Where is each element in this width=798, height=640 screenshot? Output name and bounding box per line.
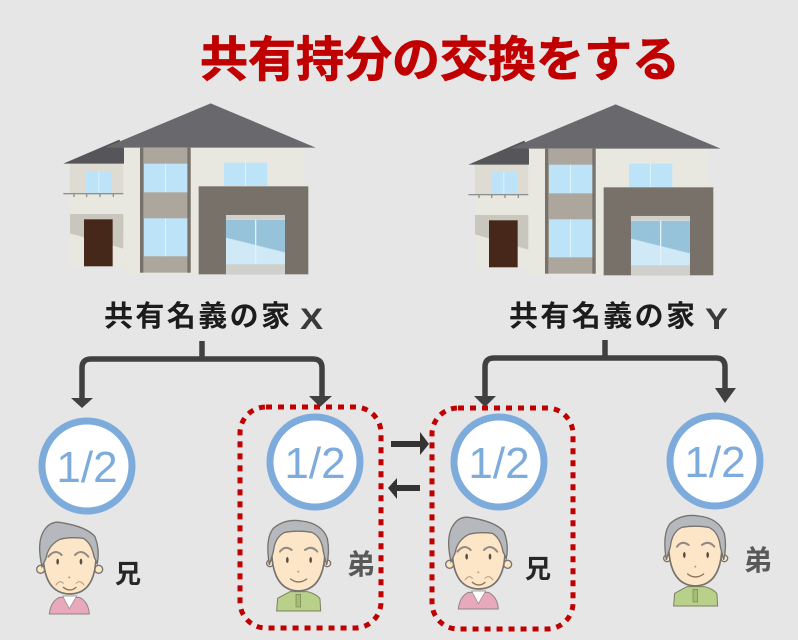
arrow: house Y split (474, 340, 736, 407)
arrow: exchange right (391, 432, 429, 455)
label: house X letter: X (300, 303, 323, 336)
label: elder brother X: 兄 (115, 559, 141, 589)
icon: elder brother X (37, 522, 103, 614)
label: elder brother Y: 兄 (525, 554, 551, 584)
label: house X: 共有名義の家 (104, 300, 292, 333)
icon: younger brother X (267, 520, 331, 611)
icon: younger brother Y (664, 515, 728, 606)
label: younger brother Y: 弟 (744, 545, 772, 576)
share circle 3 (454, 417, 544, 507)
title: 共有持分の交換をする (200, 34, 680, 87)
icon: house Y (468, 104, 721, 275)
share circle 4 (670, 416, 760, 506)
share circle 1 (42, 421, 132, 511)
arrow: exchange left (388, 478, 420, 499)
label: younger brother X: 弟 (347, 549, 375, 580)
arrow: house X split (71, 341, 332, 408)
share circle 3: 1/2 (468, 439, 530, 488)
label: house Y letter: Y (705, 303, 728, 336)
label: house Y: 共有名義の家 (509, 300, 697, 333)
share circle 4: 1/2 (684, 438, 746, 487)
callout: exchange frame right (432, 408, 573, 629)
icon: house X (63, 103, 316, 274)
icon: elder brother Y (446, 517, 512, 609)
share circle 2: 1/2 (284, 439, 346, 488)
callout: exchange frame left (240, 407, 381, 628)
share circle 1: 1/2 (56, 443, 118, 492)
share circle 2 (270, 417, 360, 507)
